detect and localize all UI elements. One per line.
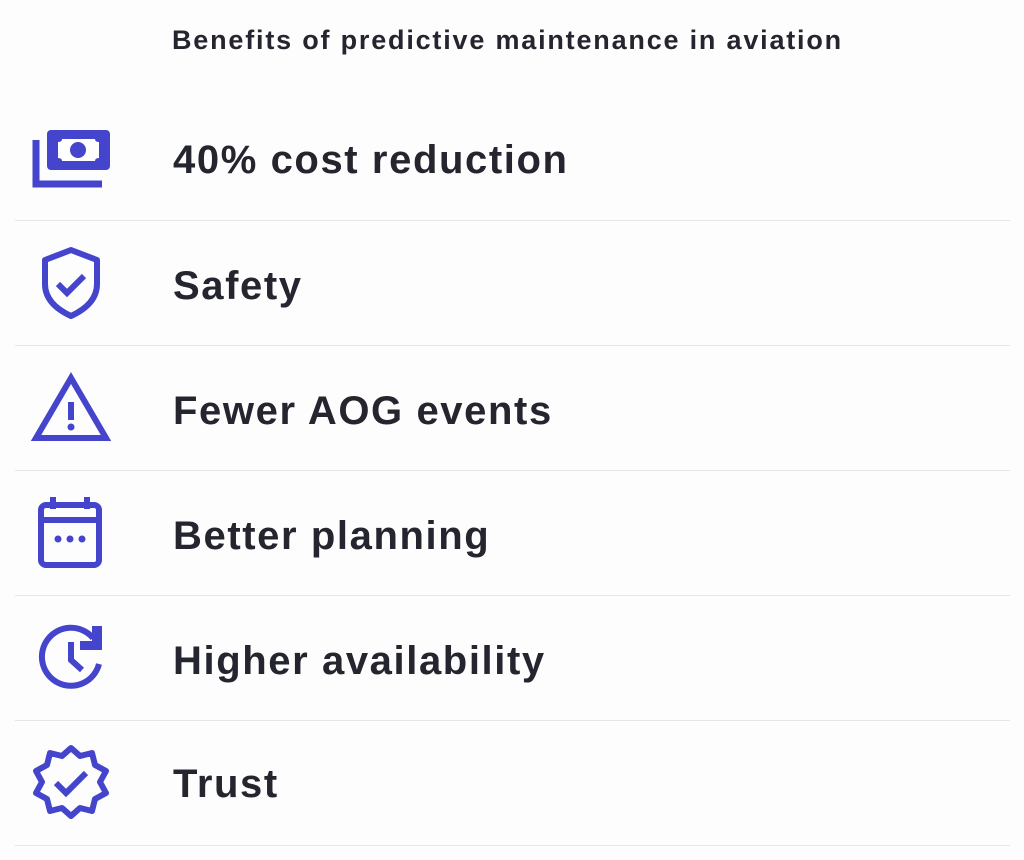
icon: money	[32, 130, 110, 188]
text: planning: Better planning	[173, 514, 490, 558]
icon: clock refresh	[38, 624, 102, 689]
icon: badge check	[33, 745, 109, 819]
icon: shield	[42, 247, 100, 319]
text: availability: Higher availability	[173, 639, 546, 683]
text: trust: Trust	[173, 762, 279, 806]
title: Benefits of predictive maintenance in aviation	[172, 25, 843, 55]
text: cost: 40% cost reduction	[173, 138, 569, 182]
icon: warning	[30, 372, 112, 441]
text: AOG: Fewer AOG events	[173, 389, 553, 433]
text: safety: Safety	[173, 264, 303, 308]
icon: calendar	[38, 497, 102, 568]
